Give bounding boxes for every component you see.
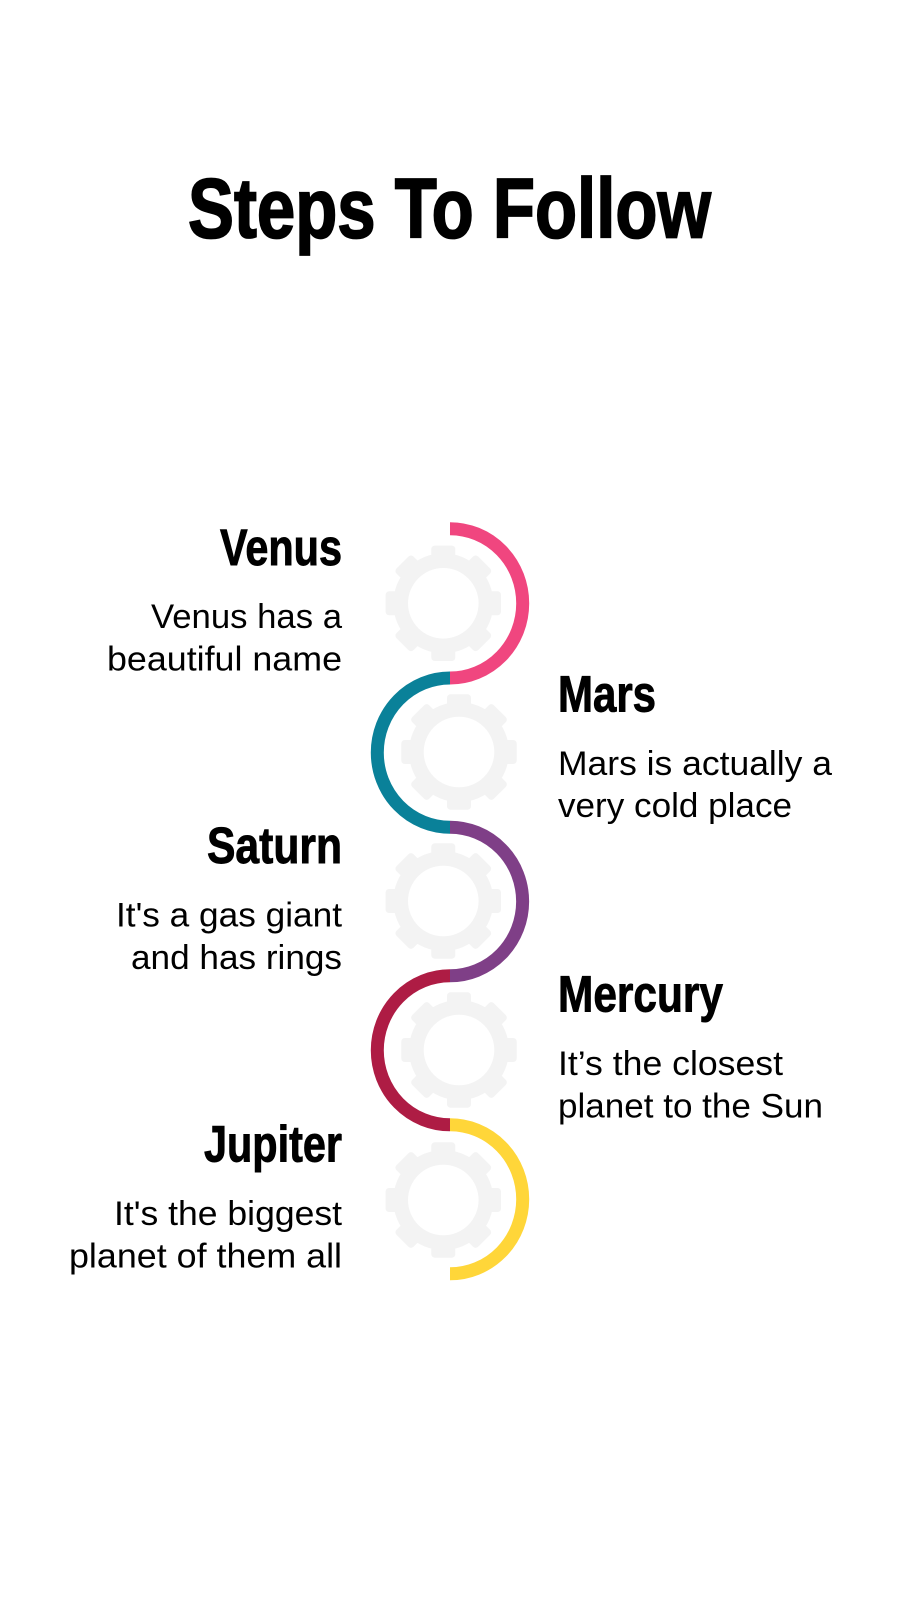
arc: pink <box>450 529 523 678</box>
step: Mercury: It’s the closest <box>558 1045 784 1083</box>
step: Mars: Mars <box>558 666 656 722</box>
step: Mars: very cold place <box>558 787 792 825</box>
step: Mercury <box>558 966 823 1126</box>
step: Jupiter: It's the biggest <box>114 1195 343 1233</box>
step: Venus <box>107 519 342 678</box>
icon: gear 4 <box>377 968 541 1132</box>
step: Venus: beautiful name <box>107 640 342 678</box>
icon: gear 1 <box>362 522 525 685</box>
step: Mercury: planet to the Sun <box>558 1088 823 1126</box>
step: Saturn: and has rings <box>131 939 342 977</box>
arc: teal <box>377 678 450 827</box>
icon: gear 5 <box>362 1118 525 1282</box>
step: Saturn <box>116 817 343 977</box>
step: Saturn: It's a gas giant <box>116 896 343 934</box>
arc: purple <box>450 827 523 976</box>
arc: yellow <box>450 1125 523 1274</box>
step: Jupiter: Jupiter <box>204 1116 342 1172</box>
step: Saturn: Saturn <box>207 817 342 874</box>
step: Jupiter: planet of them all <box>69 1238 342 1276</box>
icon: gear 2 <box>377 670 541 834</box>
step: Mars <box>558 666 832 825</box>
gears and arc diagram <box>362 522 541 1282</box>
step: Venus: Venus has a <box>151 598 342 636</box>
title: Steps To Follow <box>188 162 712 256</box>
step: Venus: Venus <box>220 519 342 576</box>
icon: gear 3 <box>362 819 525 983</box>
step: Jupiter <box>69 1116 343 1276</box>
arc: crimson <box>377 976 450 1125</box>
step: Mercury: Mercury <box>558 966 724 1022</box>
step: Mars: Mars is actually a <box>558 745 832 783</box>
